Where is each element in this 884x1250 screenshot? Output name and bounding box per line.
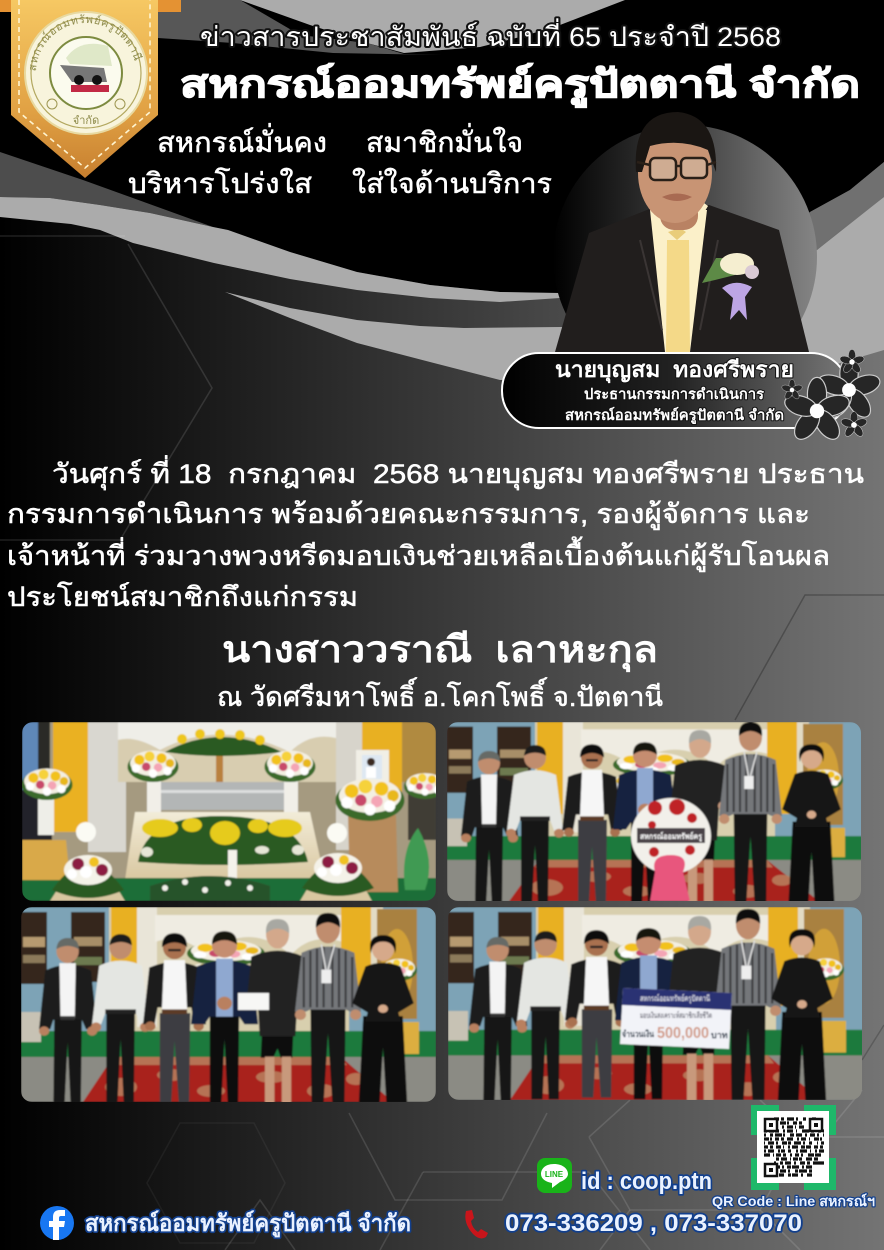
body paragraph: กรรมการดำเนินการ พร้อมด้วยคณะกรรมการ, รองผู้จัดการ และ <box>7 499 810 530</box>
QR code <box>751 1105 836 1190</box>
venue: ณ วัดศรีมหาโพธิ์ อ.โคกโพธิ์ จ.ปัตตานี <box>217 677 663 712</box>
body paragraph: เจ้าหน้าที่ ร่วมวางพวงหรีดมอบเงินช่วยเหลือเบื้องต้นแก่ผู้รับโอนผล <box>7 536 830 572</box>
name plate: สหกรณ์ออมทรัพย์ครูปัตตานี จำกัด <box>565 406 784 424</box>
name plate: นายบุญสม ทองศรีพราย <box>555 357 794 384</box>
slogans: ใส่ใจด้านบริการ <box>352 167 552 199</box>
slogans: บริหารโปร่งใส <box>128 167 312 199</box>
icon: LINE: LINE <box>545 1170 564 1179</box>
envelope <box>238 993 269 1010</box>
wreath: สหกรณ์ออมทรัพย์ครู <box>640 831 703 842</box>
seal: จำกัด <box>73 115 99 127</box>
deceased name: นางสาววราณี เลาหะกุล <box>222 629 658 673</box>
facebook page name: สหกรณ์ออมทรัพย์ครูปัตตานี จำกัด <box>85 1210 411 1238</box>
qr caption: QR Code : Line สหกรณ์ฯ <box>712 1193 875 1209</box>
body paragraph: วันศุกร์ ที่ 18 กรกฎาคม 2568 นายบุญสม ทองศรีพราย ประธาน <box>52 455 864 491</box>
slogans: สมาชิกมั่นใจ <box>366 123 523 158</box>
portrait: chairman <box>555 112 809 352</box>
circle behind portrait <box>553 125 817 389</box>
badge ribbon with seal <box>0 0 181 178</box>
cheque board <box>620 988 732 1049</box>
seal: สหกรณ์ออมทรัพย์ครูปัตตานี <box>30 14 143 70</box>
phone numbers: 073-336209 , 073-337070 <box>505 1210 802 1237</box>
cheque board: จำนวนเงิน <box>622 1029 655 1039</box>
photo: cheque presentation <box>448 907 863 1101</box>
body paragraph <box>7 455 864 612</box>
cheque board: มอบเงินสงเคราะห์สมาชิกเสียชีวิต <box>640 1010 712 1020</box>
cheque board: บาท <box>711 1030 728 1040</box>
icon: corsage <box>702 253 759 320</box>
name plate: ประธานกรรมการดำเนินการ <box>584 386 764 403</box>
line id: id : coop.ptn <box>581 1168 712 1195</box>
title: สหกรณ์ออมทรัพย์ครูปัตตานี จำกัด <box>180 63 860 108</box>
header line: ข่าวสารประชาสัมพันธ์ ฉบับที่ 65 ประจำปี 2568 <box>200 18 781 52</box>
name plate <box>502 353 848 428</box>
icons: frangipani flowers <box>781 349 882 444</box>
cheque board: 500,000 <box>657 1025 709 1042</box>
wreath <box>631 798 711 901</box>
photo: handing envelope <box>21 907 436 1105</box>
cheque board: สหกรณ์ออมทรัพย์ครูปัตตานี <box>640 993 710 1004</box>
icon: facebook <box>40 1206 74 1240</box>
seal <box>24 11 148 135</box>
slogans <box>128 123 552 199</box>
photo: group with wreath <box>447 722 862 908</box>
photo: funeral altar <box>22 722 446 901</box>
body paragraph: ประโยชน์สมาชิกถึงแก่กรรม <box>7 581 358 612</box>
icon: phone <box>465 1210 488 1238</box>
icon: LINE <box>537 1158 572 1193</box>
slogans: สหกรณ์มั่นคง <box>157 123 327 158</box>
